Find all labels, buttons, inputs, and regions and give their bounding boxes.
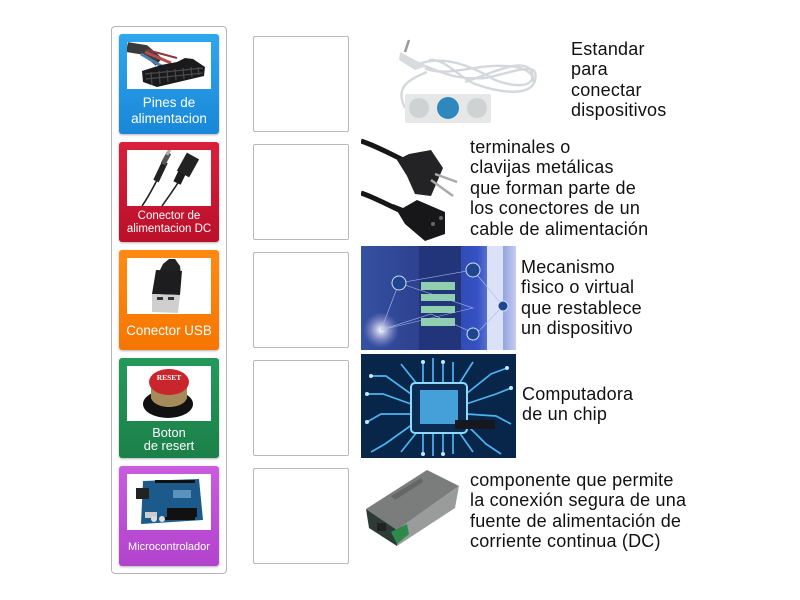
label: Boton [152, 425, 186, 440]
label: alimentacion DC [127, 223, 211, 235]
image: power cord [361, 138, 458, 241]
tile: Conector de alimentacion DC [119, 142, 219, 242]
text: definition 1 [571, 39, 666, 120]
text: definition 2: los conectores de un [470, 198, 640, 218]
image: data center network [361, 246, 516, 350]
icon: DC cable [127, 150, 211, 206]
text: definition 4: de un chip [522, 404, 607, 424]
text: definition 4 [522, 384, 633, 424]
text: definition 5: fuente de alimentación de [470, 511, 681, 531]
text: definition 2 [470, 137, 648, 239]
label: Pines de [143, 95, 195, 110]
label: alimentacion [131, 110, 207, 126]
text: definition 5: componente que permite [470, 470, 674, 490]
label [144, 425, 194, 453]
image: power strip [399, 40, 537, 123]
label: Conector de [138, 210, 200, 222]
text: definition 3: que restablece [521, 298, 642, 318]
text: definition 4: Computadora [522, 384, 633, 404]
text: definition 3: Mecanismo [521, 257, 615, 277]
icon: USB plug [127, 258, 211, 314]
text: definition 2: terminales o [470, 137, 570, 157]
empty answer slot 3 [253, 252, 349, 348]
text: definition 1: dispositivos [571, 100, 666, 120]
text: definition 5: la conexión segura de una [470, 490, 686, 510]
text: definition 2: que forman parte de [470, 178, 636, 198]
text: definition 3: un dispositivo [521, 318, 633, 338]
icon: power pin connector [127, 42, 211, 89]
label: Conector USB [126, 323, 212, 338]
text: definition 2: cable de alimentación [470, 219, 648, 239]
empty answer slot 1 [253, 36, 349, 132]
tile: Boton de resert [119, 358, 219, 458]
image: glowing chip [361, 354, 516, 458]
text: definition 5 [470, 470, 686, 551]
icon: reset button: RESET [157, 373, 181, 382]
label: Microcontrolador [128, 541, 210, 553]
text: definition 3: fìsico o virtual [521, 277, 634, 297]
empty answer slot 5 [253, 468, 349, 564]
tile: Conector USB [119, 250, 219, 350]
text: definition 1: Estandar [571, 39, 645, 59]
empty answer slot 4 [253, 360, 349, 456]
text: definition 1: conectar [571, 80, 642, 100]
label [127, 210, 211, 235]
text: definition 2: clavijas metálicas [470, 157, 614, 177]
icon: reset button [127, 366, 211, 421]
label [131, 95, 207, 126]
icon: microcontroller board [127, 474, 211, 530]
empty answer slot 2 [253, 144, 349, 240]
label: de resert [144, 438, 194, 453]
text: definition 1: para [571, 59, 608, 79]
panel: item tray [111, 26, 227, 574]
tile: Microcontrolador [119, 466, 219, 566]
image: power supply module [366, 470, 459, 546]
text: definition 3 [521, 257, 642, 338]
tile: Pines de alimentacion [119, 34, 219, 134]
text: definition 5: corriente continua (DC) [470, 531, 661, 551]
